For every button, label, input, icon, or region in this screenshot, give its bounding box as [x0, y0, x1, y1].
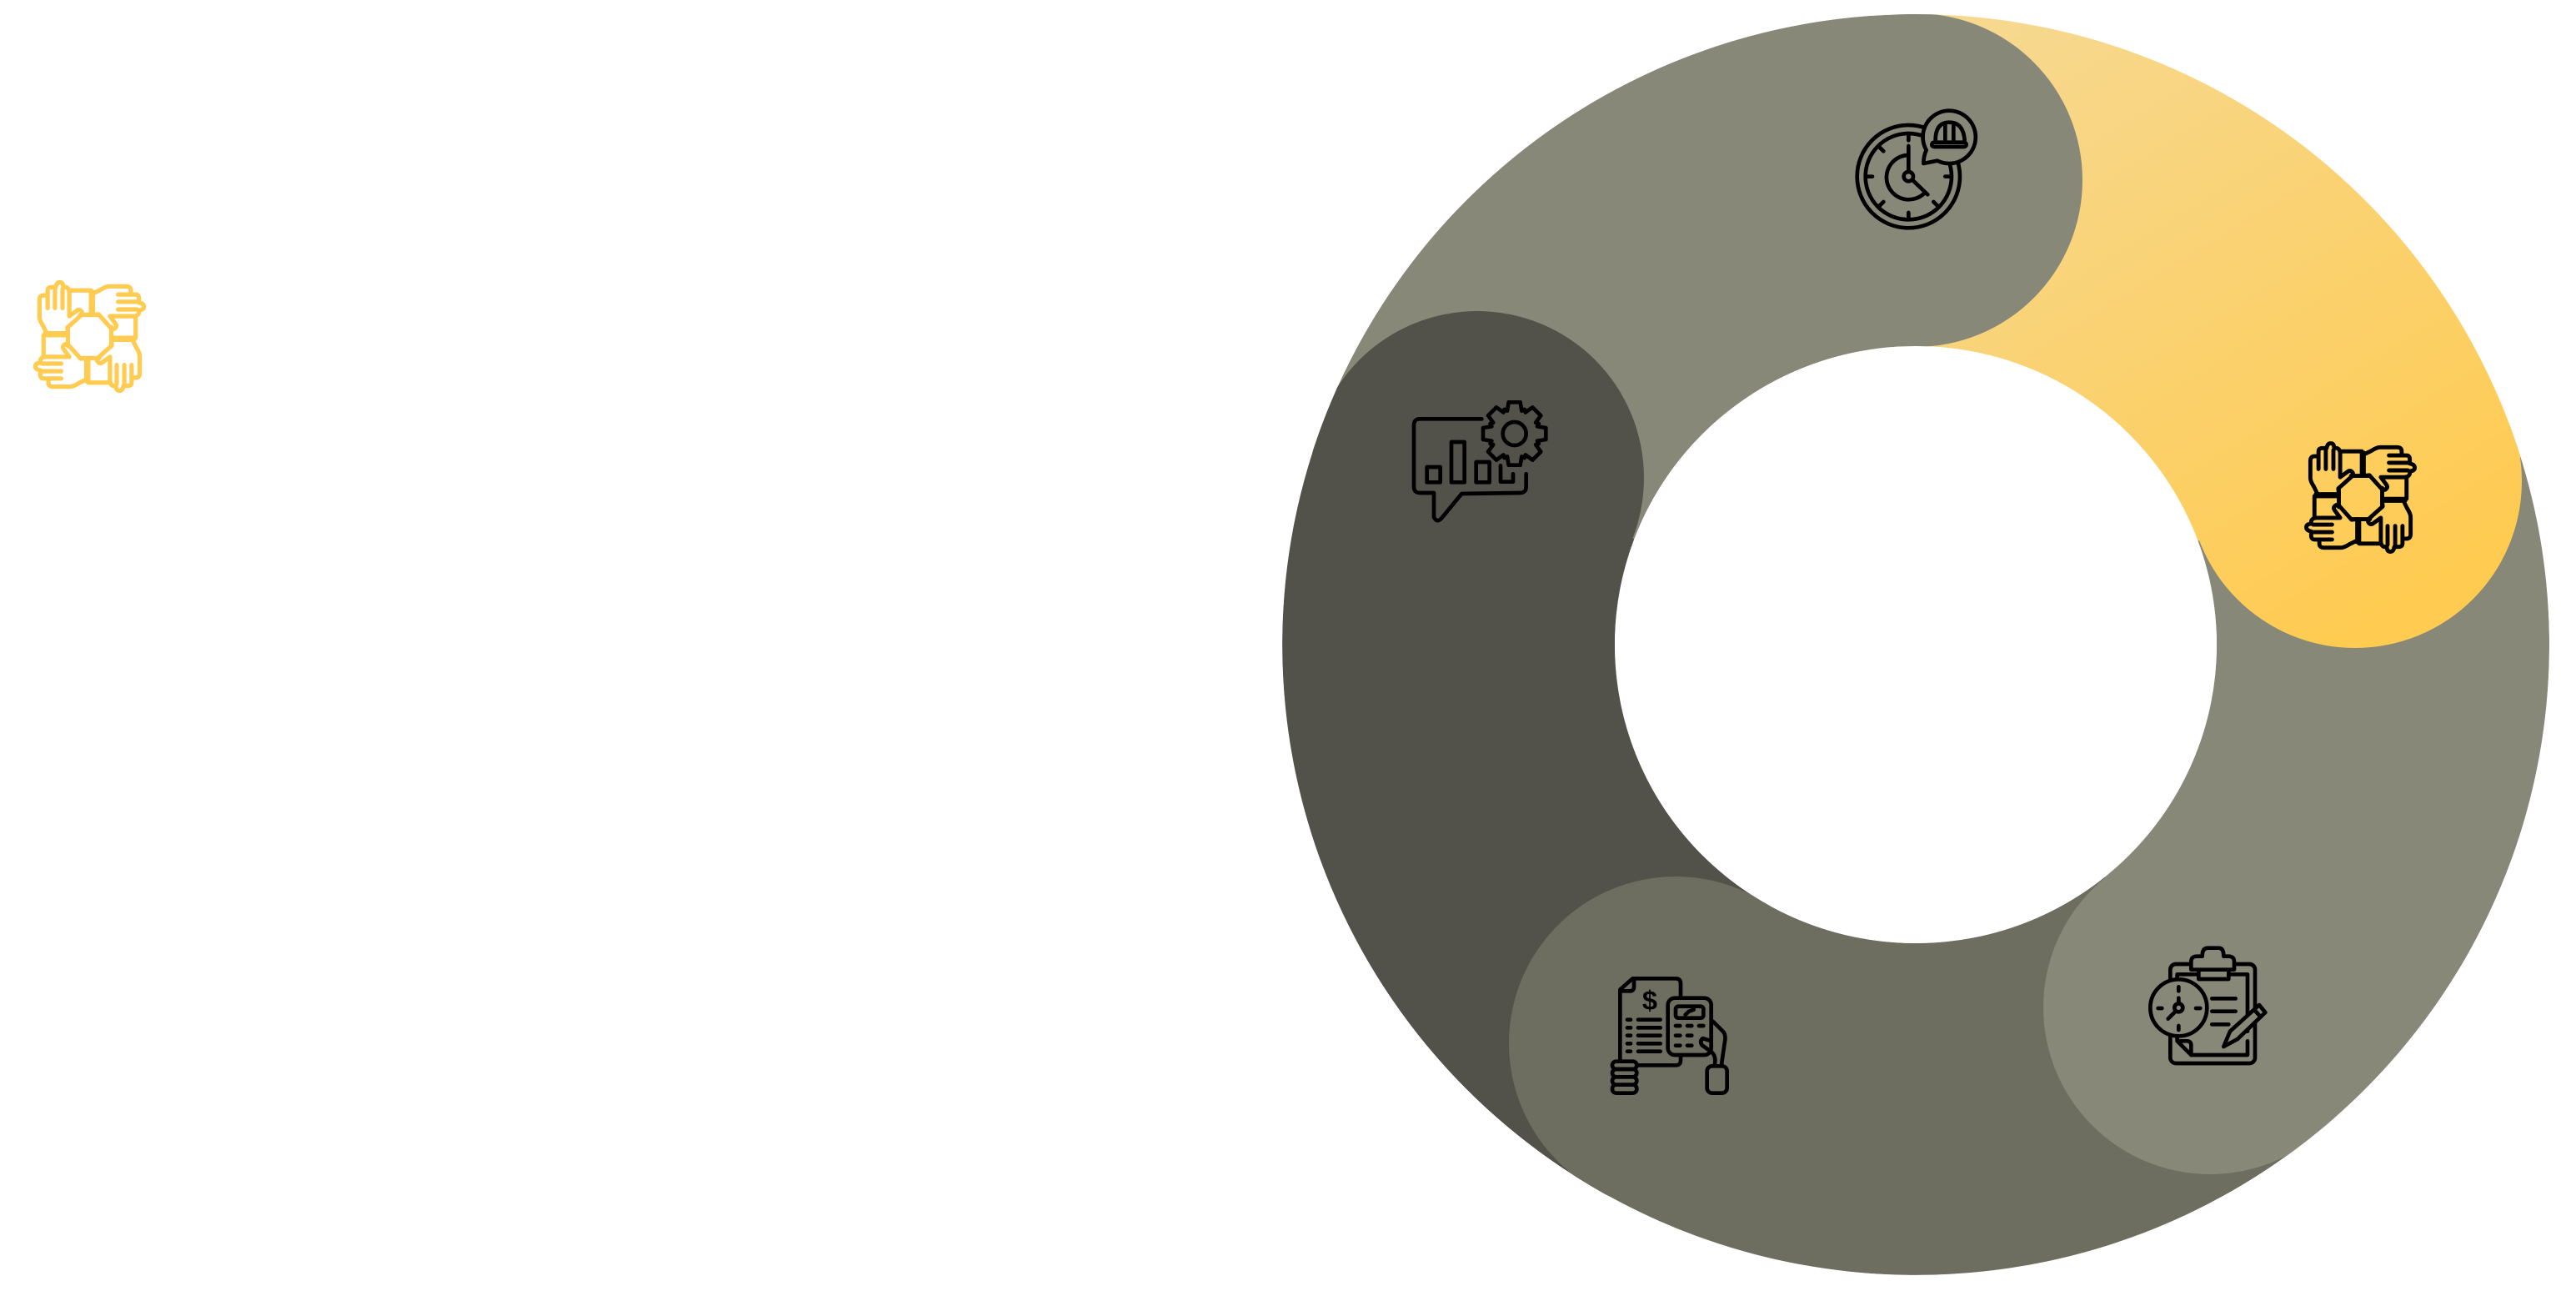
ring diagram	[1282, 13, 2549, 1275]
cap: dark end	[1312, 311, 1644, 539]
cap: top gray end	[1893, 14, 2082, 347]
icon: chart speech bubble with gear	[1414, 402, 1546, 520]
segment: bottom olive	[1572, 877, 2314, 1275]
small yellow collaboration icon	[35, 282, 143, 390]
icon: invoice with calculator and coins: $	[1642, 985, 1657, 1016]
segment: right gray	[2105, 425, 2549, 1153]
icon: clock with hard hat	[1857, 111, 1976, 228]
icon: invoice with calculator and coins	[1612, 978, 1727, 1093]
icon: collaboration hands	[2306, 444, 2414, 552]
segment: top gray	[1323, 14, 1916, 539]
segment: yellow	[1916, 14, 2521, 540]
cap: yellow end	[2199, 393, 2522, 648]
cap: right gray end	[2043, 877, 2338, 1174]
icon: clipboard with clock	[2150, 948, 2265, 1063]
cap: bottom olive end	[1509, 877, 1772, 1198]
segment: dark	[1282, 386, 1761, 1185]
